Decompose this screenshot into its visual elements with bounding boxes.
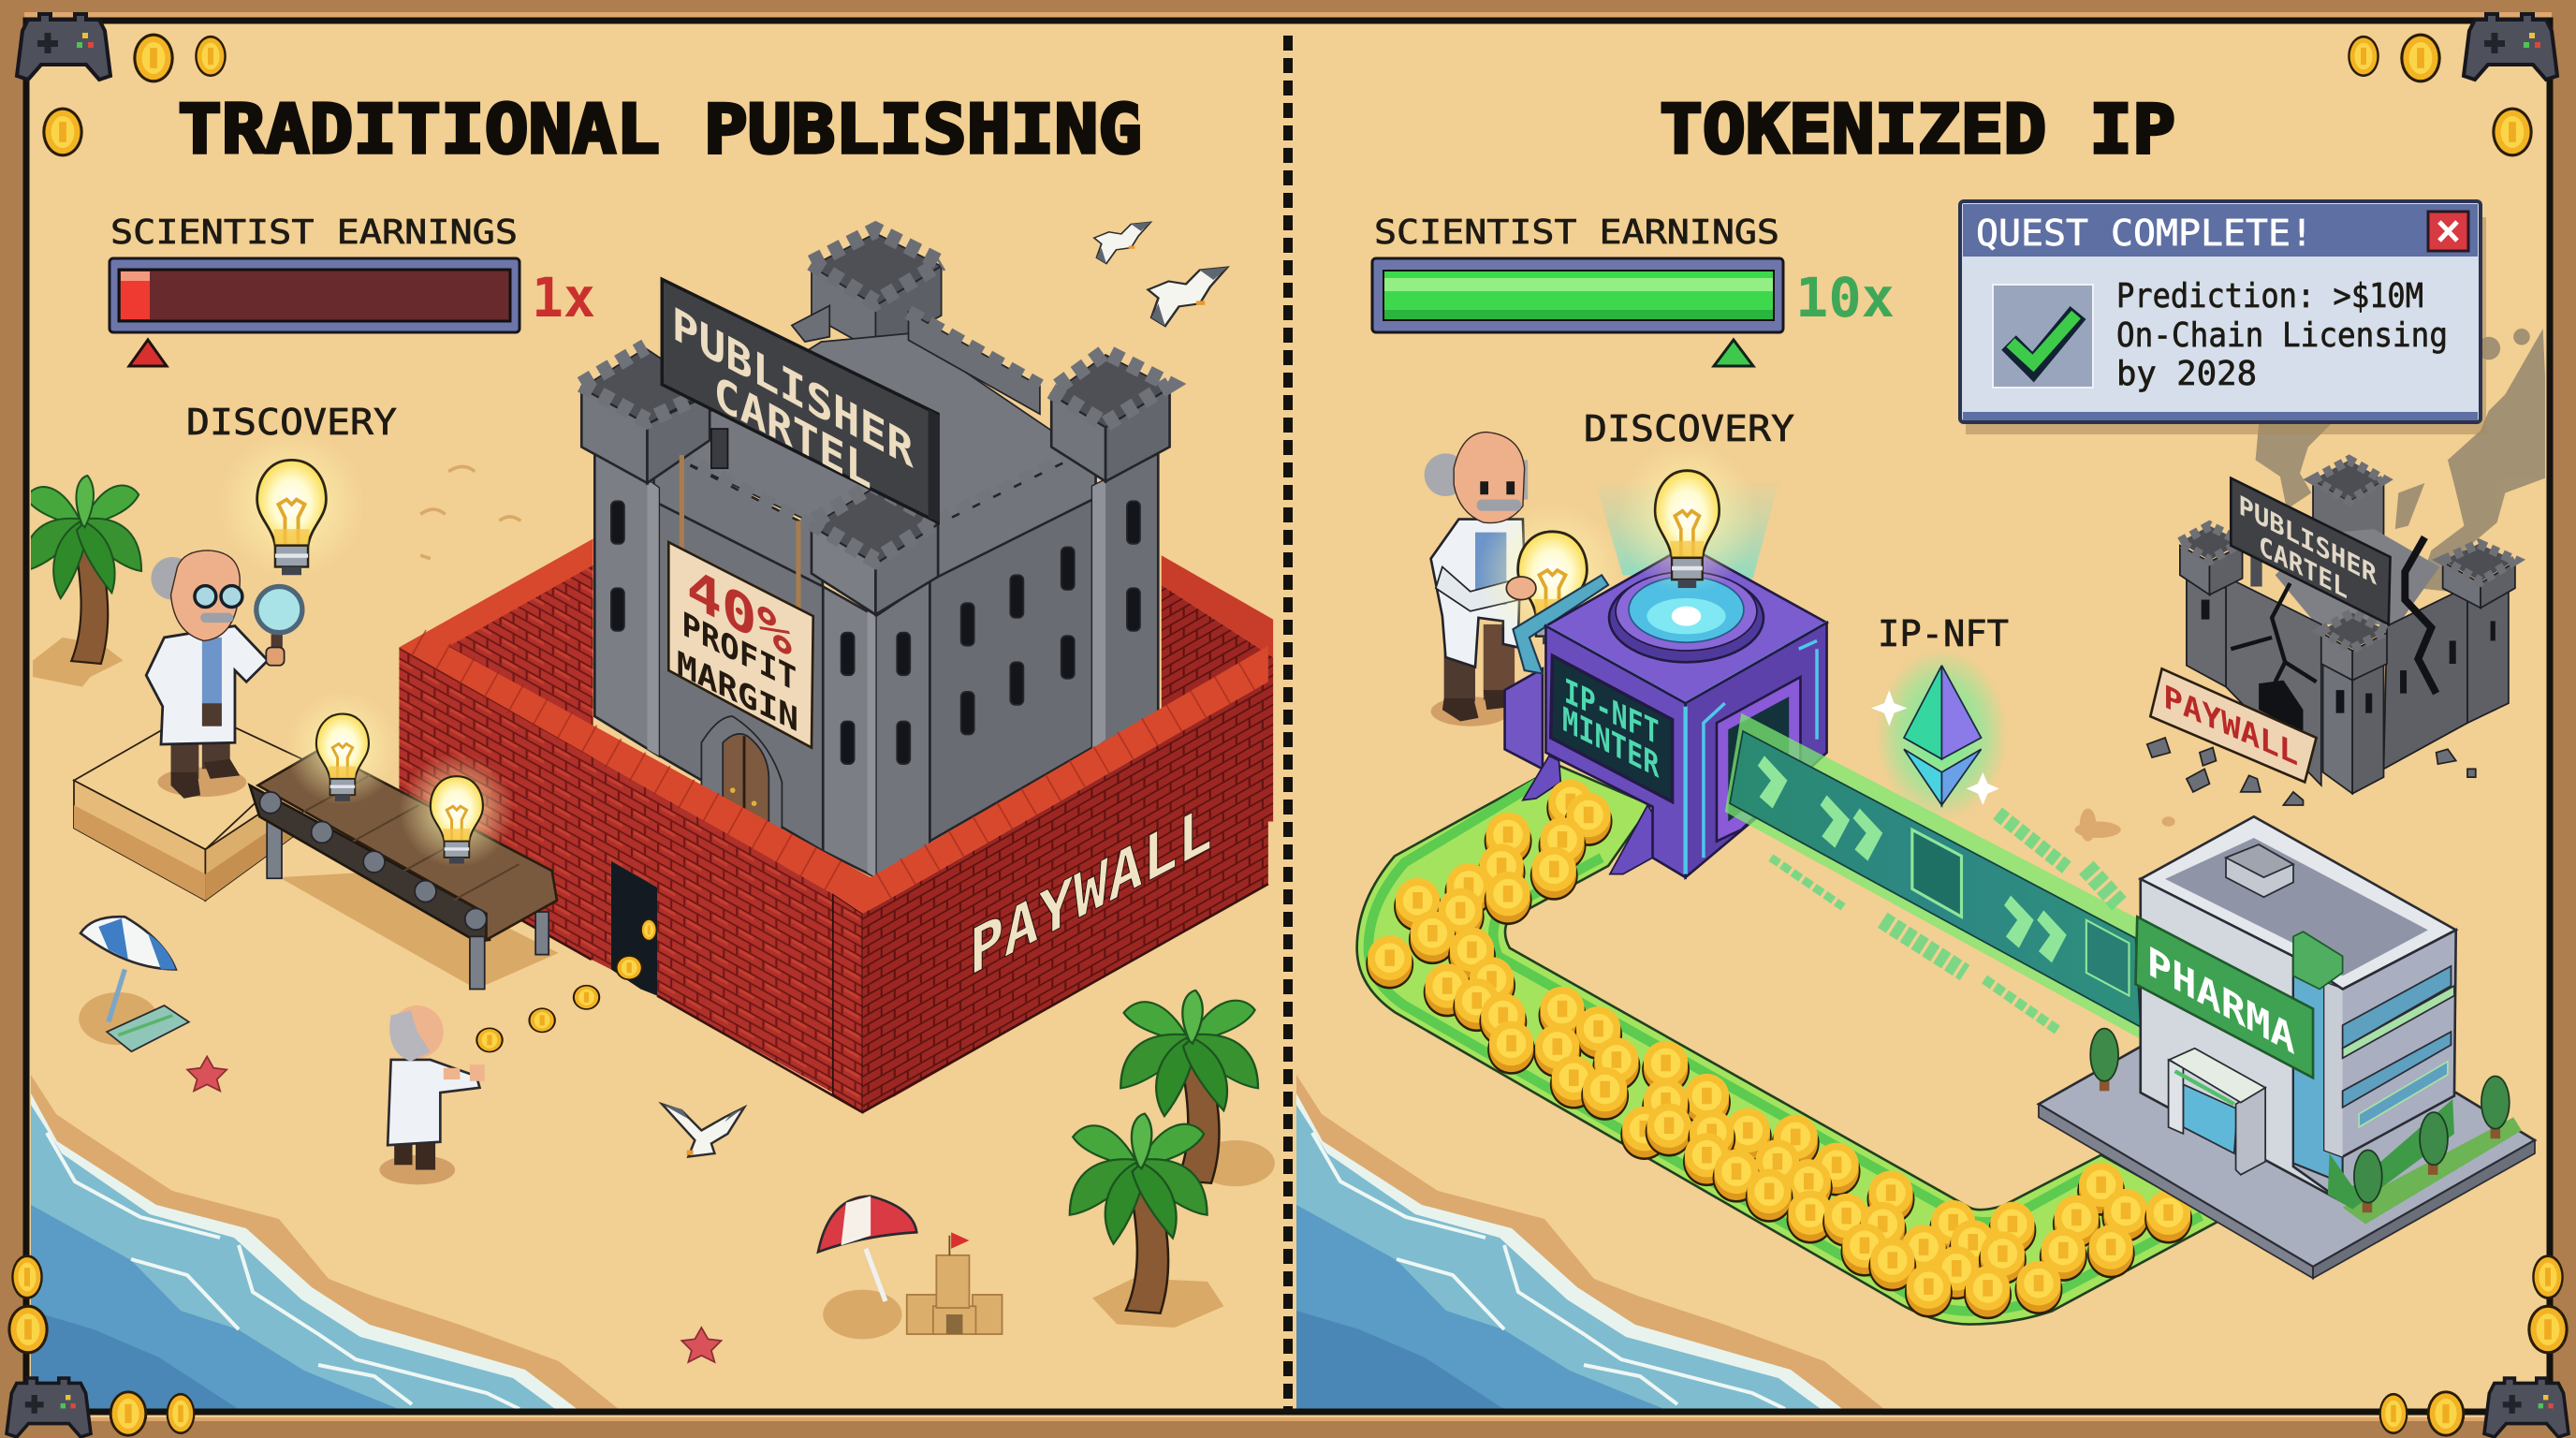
ocean left [31,1075,624,1414]
quest title: QUEST COMPLETE! [1976,213,2313,254]
quest complete window [1960,201,2486,434]
paywall brick wall front: PAYWALL [969,789,1212,990]
quest text: by 2028 [2116,355,2257,393]
ip-nft label: IP-NFT [1878,613,2009,654]
pharma right block [2324,930,2456,1157]
data beam [1725,713,2145,1042]
left bar track [119,270,510,321]
held bulb [1477,501,1628,649]
pharma building: PHARMA [2147,937,2295,1064]
starfish [681,1328,721,1362]
sand specks [2075,808,2175,842]
quest text [2116,277,2448,393]
road edge [1368,775,2202,1311]
40 percent profit margin sign: PROFIT [681,603,797,699]
pharma roof [2141,816,2456,990]
sand castle [907,1232,1003,1334]
hand [1506,577,1536,600]
castle front tower [812,485,938,877]
ip-nft minter machine: IP-NFT [1564,671,1660,753]
sand specks [420,466,520,559]
beam glow [1725,713,2145,1042]
wall lip [399,639,1268,914]
pharma green sign [2136,917,2313,1078]
discovery bulb [1617,439,1757,593]
left bar frame [110,258,520,332]
castle back parapet [792,305,1040,414]
40 percent profit margin sign [668,455,813,748]
sand platform [74,710,302,901]
right earnings label: SCIENTIST EARNINGS [1374,213,1779,252]
ruined publisher cartel sign: CARTEL [2259,530,2348,606]
pharma building [2039,816,2535,1278]
40 percent profit margin sign: 40% [687,554,792,671]
castle right wall [929,498,1092,842]
pharma base plate [2039,1047,2535,1267]
ip-nft minter machine: MINTER [1562,698,1660,786]
castle back tower [812,230,942,352]
scientist at minter [1425,433,1528,726]
seagull [1148,268,1227,326]
controller top right [2464,14,2557,80]
controller bottom left [7,1378,91,1437]
ruin right wall [2384,587,2467,769]
scene left [22,222,1275,1362]
pharma blue strip [2293,948,2343,1183]
minter left face [1545,626,1686,877]
pharma small sign [2293,932,2343,990]
ruined publisher cartel sign: PUBLISHER [2239,490,2377,592]
left earnings label: SCIENTIST EARNINGS [110,213,518,252]
minter right face [1686,623,1827,877]
minter screen [1551,655,1673,801]
gate opening [611,861,657,996]
ocean right [1296,1075,1890,1414]
publisher cartel sign: PUBLISHER [672,297,914,478]
blue umbrella [79,917,189,1051]
coin trail [476,918,657,1052]
ip-nft minter machine [1505,546,1827,877]
right discovery label: DISCOVERY [1584,408,1794,449]
controller bottom right [2484,1378,2569,1437]
castle [581,230,1170,877]
panel: tokenized ip [1296,329,2550,1414]
front left wall [399,647,833,1093]
right bar fill [1384,271,1773,319]
minter dome [1609,572,1764,662]
ruin cracks [2405,537,2437,694]
left bar value: 1x [532,266,595,330]
trees [2090,1029,2510,1212]
title: tokenized ip: TOKENIZED IP [1660,90,2175,169]
left bar marker [129,340,167,366]
conveyor belt [250,749,559,990]
castle left wall [653,492,823,851]
minter opening [1717,677,1800,842]
ruined castle [2180,460,2515,794]
green coin road [1357,766,2219,1325]
right bar value: 10x [1795,266,1895,330]
lightbulb discovery [234,447,350,575]
ruined publisher cartel sign [2231,478,2391,624]
quest text: Prediction: >$10M [2116,277,2423,315]
ip-nft gem [1871,649,2008,820]
ruin left tower [2180,526,2243,687]
minter side panel [1505,668,1543,769]
castle right parapet [938,462,1097,579]
right bar frame [1372,258,1783,332]
pharma lawn [2343,1117,2522,1224]
bulbs on conveyor [288,703,511,863]
coins on road [1366,780,2192,1319]
right earnings meter [1372,213,1895,366]
front right wall [862,743,1268,1110]
right bar track [1383,270,1775,321]
controller top left [17,14,110,80]
palm top left [22,476,141,687]
publisher cartel sign: CARTEL [714,364,871,500]
pharma windows [2343,966,2454,1127]
publisher cartel sign [662,279,940,522]
front corner [833,894,862,1112]
scientist with magnifier [146,550,302,799]
castle door [701,716,782,871]
beam streaks [1771,814,2119,1032]
title: traditional publishing: TRADITIONAL PUBLISHING [178,90,1142,169]
left discovery label: DISCOVERY [186,402,397,443]
panel: traditional publishing [22,222,1275,1414]
castle windows [611,501,1140,764]
40 percent profit margin sign: MARGIN [677,643,798,740]
quest close button [2428,212,2468,251]
broken paywall sign: PAYWALL [2163,679,2298,774]
right bar marker [1714,340,1753,366]
seagull [662,1104,744,1157]
scene right [1357,329,2550,1325]
red umbrella [818,1196,916,1339]
broken paywall sign [2150,668,2317,782]
pharma entrance [2169,1049,2265,1175]
castle roof [691,333,1061,519]
ruin front tower [2321,613,2387,794]
center dashed divider [1283,36,1293,1410]
pharma green base [2328,1099,2454,1210]
ruin right tower [2443,544,2515,723]
starfish [187,1056,227,1091]
smoke [2256,329,2550,592]
ruin left wall [2226,577,2321,785]
ruin roof [2276,529,2439,624]
palm tree [1070,1114,1223,1328]
castle right tower [1051,352,1170,749]
rubble [2147,738,2476,805]
pharma left face [2141,879,2344,1203]
seagull [1094,222,1150,264]
quest text: On-Chain Licensing [2116,316,2448,355]
hologram beam [1596,481,1779,579]
small scientist [379,1005,485,1184]
castle left tower [581,346,710,756]
paywall brick wall front [399,639,1268,1112]
left earnings meter [110,213,595,366]
quest check icon [1993,285,2093,388]
pharma roof unit [2226,844,2293,897]
brick enclosure back walls [399,539,1273,822]
quest title bar [1963,204,2478,257]
ruin back tower [2313,460,2384,542]
castle left parapet [653,447,823,587]
minter legs [1523,756,1560,800]
palm tree [1120,990,1275,1186]
minter top [1545,546,1827,703]
left bar fill [121,271,150,319]
